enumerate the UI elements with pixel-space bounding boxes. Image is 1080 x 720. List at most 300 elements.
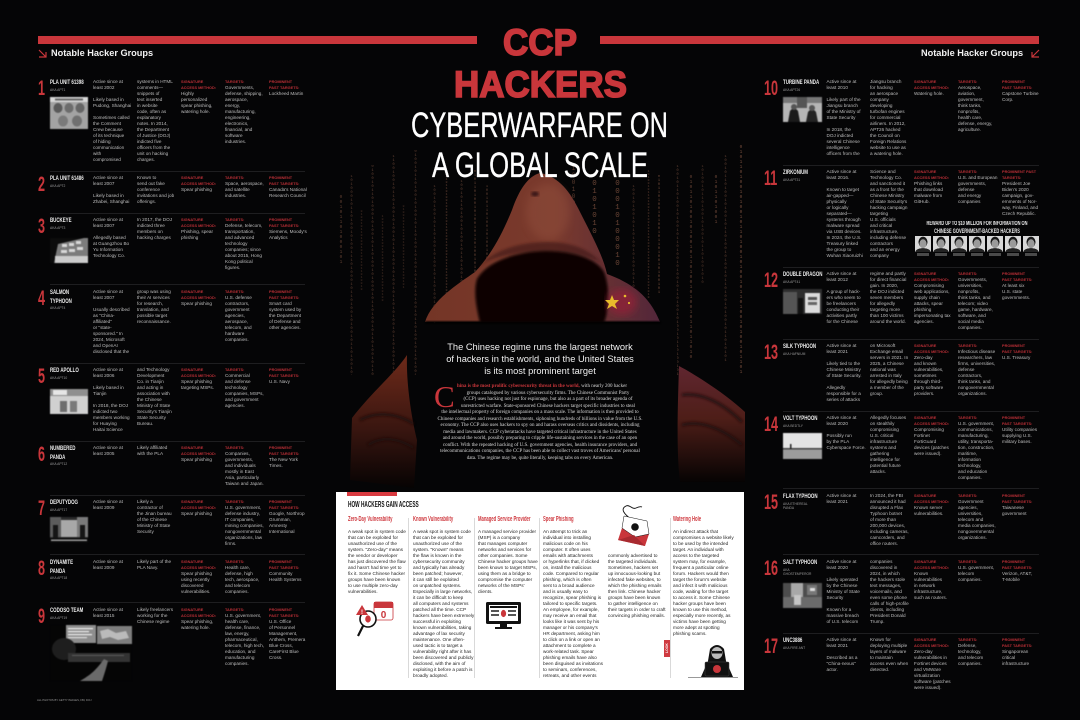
methods: ACCESS METHOD: bbox=[181, 566, 216, 570]
history: Allegedly bbox=[826, 385, 845, 390]
history continued bbox=[870, 415, 906, 475]
method text: spear phishing continued bbox=[608, 553, 666, 619]
past targets: PROMINENT bbox=[1002, 416, 1025, 420]
targets bbox=[958, 637, 983, 667]
methods: party software bbox=[914, 385, 943, 390]
history continued: PLA Navy. bbox=[137, 565, 158, 570]
past targets: TARGETS: bbox=[1002, 176, 1021, 180]
past targets: PAST TARGETS: bbox=[269, 506, 299, 510]
targets: nonprofits, bbox=[958, 109, 980, 114]
methods: ACCESS METHOD: bbox=[914, 176, 949, 180]
methods: impersonating tax bbox=[914, 313, 951, 318]
history continued: targeting more bbox=[870, 307, 900, 312]
history continued: text inserted bbox=[137, 97, 162, 102]
past targets: PROMINENT bbox=[269, 368, 292, 372]
targets: engineering, bbox=[225, 115, 251, 120]
binary rain background: 0101101001010010110100101001011010010100101101 bbox=[738, 145, 744, 375]
targets: technology, bbox=[958, 463, 981, 468]
methods: Zero-day bbox=[914, 649, 933, 654]
history continued: deploying multiple bbox=[870, 643, 907, 648]
targets: governments, bbox=[958, 181, 986, 186]
targets: U.S. and European bbox=[958, 175, 997, 180]
method text: managed service provider: networks and services for bbox=[478, 547, 531, 552]
targets: think tanks, and bbox=[958, 379, 991, 384]
past targets: PROMINENT bbox=[269, 500, 292, 504]
targets: and individuals bbox=[225, 463, 256, 468]
history continued: gain. In 2020, bbox=[870, 283, 898, 288]
method text: known vulnerability: been discovered and publicly bbox=[413, 655, 473, 660]
reward headline: REWARD UP TO $10 MILLION FOR INFORMATION ON bbox=[926, 221, 1027, 227]
methods bbox=[914, 271, 951, 325]
group 17: UNC3886 bbox=[764, 637, 1040, 697]
targets: electronics, bbox=[225, 121, 248, 126]
reward headline: CHINESE GOVERNMENT-BACKED HACKERS bbox=[934, 229, 1020, 235]
past targets: PROMINENT bbox=[269, 218, 292, 222]
history: Known to target bbox=[826, 187, 859, 192]
method text: spear phishing: emails with attachments bbox=[543, 553, 593, 558]
method heading: spear phishing: Spear Phishing bbox=[543, 516, 574, 523]
past targets: CareFirst Blue bbox=[269, 649, 299, 654]
targets: nonprofits, bbox=[958, 289, 980, 294]
history: at Guangzhou Bo bbox=[93, 241, 129, 246]
method text: known vulnerability: known vulnerabilities, taking bbox=[413, 625, 471, 630]
methods: watering hole. bbox=[181, 625, 210, 630]
intro body text: telecommunications companies, the CCP has been able to collect vast troves of Americans' personal bbox=[440, 449, 640, 454]
history: Zhabei, Shanghai bbox=[93, 199, 129, 204]
photo: press conference bbox=[782, 289, 822, 314]
method text: spear phishing continued: convincing phishing emails. bbox=[608, 613, 665, 618]
past targets: Taiwanese bbox=[1002, 505, 1024, 510]
history continued: potential future bbox=[870, 463, 901, 468]
panel heading: HOW HACKERS GAIN ACCESS bbox=[348, 499, 419, 509]
name bbox=[783, 493, 833, 510]
group 12: Double Dragon bbox=[764, 271, 1040, 331]
history continued: as a front for the bbox=[870, 187, 904, 192]
targets bbox=[225, 607, 264, 667]
history continued: in website bbox=[137, 103, 158, 108]
past targets: way, Finland, and bbox=[1002, 205, 1038, 210]
method text: spear phishing: manager or his company's bbox=[543, 625, 598, 630]
methods: using recently bbox=[181, 577, 210, 582]
history: A group of hack- bbox=[826, 289, 860, 294]
targets: manufacturing bbox=[225, 655, 254, 660]
targets: mostly in East bbox=[225, 469, 254, 474]
targets: hardware bbox=[225, 331, 244, 336]
binary rain background: 00101101000101 bbox=[338, 195, 344, 265]
targets: defense, high bbox=[225, 571, 253, 576]
number: 12 bbox=[764, 268, 778, 292]
name bbox=[783, 559, 833, 576]
name: AKA BEDTLY bbox=[783, 424, 803, 428]
method text: watering hole: target. An individual with bbox=[673, 547, 724, 552]
history continued: company bbox=[870, 253, 889, 258]
history continued: State Security bbox=[137, 415, 166, 420]
targets: and advanced bbox=[225, 235, 254, 240]
methods: in network bbox=[914, 583, 935, 588]
name bbox=[783, 169, 819, 182]
history continued: Development bbox=[137, 373, 164, 378]
targets: defense bbox=[958, 367, 975, 372]
targets: utility, transporta- bbox=[958, 439, 993, 444]
method text: spear phishing: malicious code on his bbox=[543, 541, 588, 546]
method text: zero-day: the vendor or developer bbox=[348, 553, 398, 558]
targets: government bbox=[225, 307, 250, 312]
method text: managed service provider: clients. bbox=[478, 589, 493, 594]
history continued: arrested in Italy bbox=[870, 373, 902, 378]
targets: TARGETS: bbox=[958, 272, 977, 276]
subheading bbox=[446, 342, 634, 376]
method text: watering hole: phishing scams. bbox=[673, 631, 707, 636]
method text: managed service provider: other companies. Some bbox=[478, 553, 528, 558]
history continued: around the world. bbox=[870, 319, 906, 324]
method text: known vulnerability: the flaw is known in the bbox=[413, 553, 461, 558]
targets: information bbox=[958, 457, 981, 462]
targets: and telecom bbox=[225, 583, 250, 588]
method text: spear phishing continued: infected fake websites, to bbox=[608, 577, 661, 582]
history continued: and an energy bbox=[870, 247, 900, 252]
history: responsible for a bbox=[826, 391, 861, 396]
history: affiliated" bbox=[93, 319, 112, 324]
method text: spear phishing continued: groups have been known bbox=[608, 595, 660, 600]
binary rain background: 1010010110100101001011010010100101101001010 bbox=[647, 170, 650, 299]
name: FLAX TYPHOON bbox=[783, 493, 818, 500]
methods: Compromising bbox=[914, 427, 944, 432]
past targets: PROMINENT bbox=[269, 446, 292, 450]
history continued: than 100 victims bbox=[870, 313, 904, 318]
history: of its technique bbox=[93, 133, 124, 138]
method text: spear phishing continued: up innocuous-looking but bbox=[608, 571, 660, 576]
method text: zero-day: to use multiple zero-day bbox=[348, 583, 398, 588]
method text: known vulnerability: been patched; however, bbox=[413, 571, 463, 576]
photo: harbor bbox=[782, 433, 822, 459]
history continued: including cameras, bbox=[870, 529, 909, 534]
targets: telecom, high tech, bbox=[225, 643, 264, 648]
history: Active since at bbox=[93, 289, 123, 294]
past targets: PROMINENT bbox=[1002, 560, 1025, 564]
methods: were issued). bbox=[914, 451, 942, 456]
history continued: hacking campaign bbox=[870, 205, 907, 210]
methods: SIGNATURE bbox=[181, 218, 203, 222]
methods: sometimes bbox=[914, 373, 936, 378]
past targets: PAST TARGETS: bbox=[269, 614, 299, 618]
history bbox=[826, 343, 862, 403]
history: "China-nexus" bbox=[826, 661, 856, 666]
past targets: U.S. state bbox=[1002, 289, 1022, 294]
history: Active since at bbox=[826, 559, 856, 564]
targets: U.S. government, bbox=[958, 421, 994, 426]
history: Cyberspace Force. bbox=[826, 445, 866, 450]
history: as "China- bbox=[93, 313, 115, 318]
method heading: zero-day: Zero-Day Vulnerability bbox=[348, 516, 392, 523]
name: UNC3886 bbox=[783, 637, 802, 644]
name: SALT TYPHOON bbox=[783, 559, 817, 566]
targets bbox=[958, 343, 995, 397]
method text: known vulnerability: and typically has already bbox=[413, 565, 464, 570]
history continued bbox=[870, 271, 906, 325]
group 3: Buckeye bbox=[38, 214, 307, 270]
methods bbox=[914, 559, 949, 601]
targets bbox=[225, 445, 264, 487]
method text: spear phishing bbox=[543, 529, 603, 679]
history continued: unit on hacking bbox=[137, 151, 168, 156]
targets: companies, MSPs, bbox=[225, 391, 264, 396]
history continued: the Jinan bureau bbox=[137, 511, 172, 516]
method text: managed service provider: that manages computer bbox=[478, 541, 527, 546]
targets bbox=[958, 271, 993, 331]
methods: SIGNATURE bbox=[181, 608, 203, 612]
methods: and VMWare bbox=[914, 667, 941, 672]
methods: SIGNATURE bbox=[181, 560, 203, 564]
history continued: notes. In 2014, bbox=[137, 121, 168, 126]
number: 14 bbox=[764, 412, 778, 436]
history: Security bbox=[826, 595, 843, 600]
past targets: PROMINENT bbox=[1002, 494, 1025, 498]
history: Likely based in bbox=[93, 193, 124, 198]
number: 6 bbox=[38, 442, 45, 466]
history bbox=[93, 499, 123, 511]
methods: vulnerabilities, bbox=[914, 367, 943, 372]
method text: managed service provider: Chinese hacker groups have bbox=[478, 559, 538, 564]
past targets: PROMINENT bbox=[1002, 80, 1025, 84]
method text: spear phishing continued: Sometimes, hackers set bbox=[608, 565, 658, 570]
method text: known vulnerability: it can be difficult to keep bbox=[413, 595, 463, 600]
name: ZIRKONIUM bbox=[783, 169, 808, 176]
past targets: the Department bbox=[269, 313, 301, 318]
group 6: Numbered Panda bbox=[38, 445, 306, 489]
past targets: PAST TARGETS: bbox=[1002, 422, 1032, 426]
history continued: APT26 hacked bbox=[870, 127, 900, 132]
past targets: PROMINENT bbox=[269, 80, 292, 84]
method text: managed service provider: been known to target MSPs, bbox=[478, 565, 537, 570]
targets: about 2015, Hong bbox=[225, 253, 262, 258]
past targets: U.S. Navy bbox=[269, 379, 290, 384]
targets: TARGETS: bbox=[225, 80, 244, 84]
history continued: of State Security's bbox=[870, 199, 907, 204]
methods: attacks, spear bbox=[914, 301, 943, 306]
history bbox=[93, 607, 123, 619]
targets: Defense, telecom, bbox=[225, 223, 262, 228]
method text: zero-day: fix it. Some Chinese hacker bbox=[348, 571, 405, 576]
targets: universities, bbox=[958, 283, 983, 288]
name: PANDA bbox=[783, 506, 794, 510]
methods: ACCESS METHOD: bbox=[181, 86, 216, 90]
history: least 2007 bbox=[93, 295, 114, 300]
history: the Comment bbox=[93, 121, 121, 126]
method text: known vulnerability: patched all the time. CCP bbox=[413, 607, 466, 612]
history: for Huaying bbox=[93, 421, 117, 426]
methods: vulnerabilities bbox=[914, 577, 942, 582]
left arm fold bbox=[360, 414, 414, 448]
method text: known vulnerability: it can still be exploited bbox=[413, 577, 459, 582]
history: Active since at bbox=[93, 217, 123, 222]
history: officers from the bbox=[826, 151, 860, 156]
history: Active since at bbox=[826, 637, 856, 642]
method text: known vulnerability: successful in exploiting bbox=[413, 619, 461, 624]
methods: Phishing links bbox=[914, 181, 942, 186]
history: air-gapped— bbox=[826, 193, 853, 198]
title bbox=[411, 22, 668, 185]
history: least 2015 bbox=[93, 613, 114, 618]
method text: spear phishing: to click on a link or open an bbox=[543, 637, 600, 642]
history: via USB devices. bbox=[826, 229, 862, 234]
past targets: U.S. Treasury bbox=[1002, 355, 1030, 360]
method text: spear phishing: been disguised as invitations bbox=[543, 661, 603, 666]
past targets: International bbox=[269, 529, 295, 534]
method text: managed service provider: compromise the computer bbox=[478, 577, 532, 582]
targets: TARGETS: bbox=[225, 608, 244, 612]
methods: vulnerabilities. bbox=[914, 511, 943, 516]
name: BUCKEYE bbox=[50, 217, 72, 224]
targets: think tanks, and bbox=[958, 295, 991, 300]
targets: contractors, bbox=[225, 301, 249, 306]
past targets bbox=[1002, 271, 1032, 301]
past targets: of Personnel bbox=[269, 625, 295, 630]
methods bbox=[181, 218, 216, 240]
method text: spear phishing: retreats, and other events bbox=[543, 673, 596, 678]
history: Active since at bbox=[93, 79, 123, 84]
past targets: campaign, gov- bbox=[1002, 193, 1034, 198]
past targets: Community bbox=[269, 571, 292, 576]
past targets: Cross. bbox=[269, 655, 282, 660]
methods: Known server bbox=[914, 505, 942, 510]
targets: companies. bbox=[225, 589, 249, 594]
methods bbox=[914, 169, 949, 205]
name: AKA HAFNIUM bbox=[783, 352, 805, 356]
method text: watering hole: access to the targeted bbox=[673, 553, 719, 558]
history: Pudong, Shanghai bbox=[93, 103, 131, 108]
name bbox=[50, 175, 84, 188]
binary rain background: 0100101101001010010110100101 bbox=[402, 205, 405, 289]
history continued: Trump. bbox=[870, 619, 885, 624]
targets: telecom; video bbox=[958, 301, 988, 306]
methods: Fortinet bbox=[914, 433, 930, 438]
targets: nongovernmental bbox=[958, 529, 994, 534]
method text: watering hole: hacker groups have been bbox=[673, 601, 726, 606]
method text: watering hole: known to use this method, bbox=[673, 607, 727, 612]
targets: companies bbox=[958, 199, 980, 204]
past targets bbox=[1002, 79, 1039, 103]
targets: Kong political bbox=[225, 259, 253, 264]
history continued: for allegedly bbox=[870, 301, 895, 306]
history continued: of the Chinese bbox=[137, 517, 167, 522]
past targets bbox=[1002, 559, 1032, 583]
methods bbox=[914, 415, 949, 457]
number: 10 bbox=[764, 76, 778, 100]
method heading: watering hole: Watering Hole bbox=[673, 516, 701, 523]
history continued: contractors bbox=[870, 241, 893, 246]
photo: hacker at monitors bbox=[50, 625, 132, 681]
history continued: for hacking bbox=[870, 85, 893, 90]
history continued: systems in HTML bbox=[137, 79, 173, 84]
methods: infrastructure, bbox=[914, 589, 942, 594]
history: Likely operated bbox=[826, 577, 858, 582]
methods: Spear phishing, bbox=[181, 619, 213, 624]
methods bbox=[181, 290, 216, 306]
history continued: calls of high-profile bbox=[870, 601, 909, 606]
targets: Commercial bbox=[225, 373, 250, 378]
history continued: on Microsoft bbox=[870, 343, 895, 348]
targets: organizations. bbox=[958, 391, 987, 396]
intro body text: economy. The CCP also uses hackers to spy on and harass overseas critics and dissidents, including bbox=[441, 423, 639, 428]
targets: law, energy, bbox=[225, 631, 249, 636]
past targets: governments. bbox=[1002, 295, 1030, 300]
name: AKA APT12 bbox=[50, 462, 67, 466]
methods: SIGNATURE bbox=[181, 500, 203, 504]
targets: Taiwan and Japan. bbox=[225, 481, 264, 486]
methods: SIGNATURE bbox=[181, 290, 203, 294]
history continued: servers in 2021. In bbox=[870, 355, 908, 360]
methods: ACCESS METHOD: bbox=[914, 644, 949, 648]
past targets: Management, bbox=[269, 631, 297, 636]
methods bbox=[914, 79, 949, 97]
method text: watering hole: frequent a particular online bbox=[673, 565, 729, 570]
icon: hooked envelope bbox=[618, 504, 652, 548]
method text: known vulnerability: Especially in large networks, bbox=[413, 589, 472, 594]
history: State Security bbox=[826, 115, 855, 120]
history: sponsored." In bbox=[93, 331, 123, 336]
hood shade bbox=[478, 242, 606, 270]
method text: spear phishing: phishing, which is often bbox=[543, 577, 591, 582]
method text: spear phishing: code. Compared to regular bbox=[543, 571, 599, 576]
history continued: gathering bbox=[870, 451, 889, 456]
method text: spear phishing continued: commonly advertised to bbox=[608, 553, 658, 558]
history: least 2009 bbox=[93, 565, 114, 570]
binary rain background: 101001011010010100101101001010 bbox=[700, 165, 704, 285]
history continued: the Chinese bbox=[137, 397, 162, 402]
history bbox=[93, 559, 123, 571]
methods: such as routers. bbox=[914, 595, 947, 600]
past targets: PAST TARGETS: bbox=[269, 182, 299, 186]
history continued: Ministry of State bbox=[137, 403, 170, 408]
icon: magnifier, warning and calendar: ! bbox=[361, 610, 363, 616]
name bbox=[50, 367, 92, 380]
number: 11 bbox=[764, 166, 777, 190]
past targets: Utility companies bbox=[1002, 427, 1037, 432]
hood highlight bbox=[526, 184, 570, 240]
photo: press briefing bbox=[50, 517, 88, 543]
method text: spear phishing: on, install the malicious bbox=[543, 565, 591, 570]
history continued: Known for bbox=[870, 637, 891, 642]
name: GHOSTEMPEROR bbox=[783, 572, 811, 576]
history continued bbox=[137, 79, 173, 162]
history continued: for commercial bbox=[870, 115, 900, 120]
binary rain background: 0101010 bbox=[590, 180, 598, 236]
history continued: and critical bbox=[870, 223, 892, 228]
past targets: PAST TARGETS: bbox=[269, 566, 299, 570]
methods: SIGNATURE bbox=[914, 272, 936, 276]
past targets: Amnesty bbox=[269, 523, 287, 528]
history continued: companies bbox=[870, 559, 892, 564]
name bbox=[783, 415, 833, 428]
history continued: systems and bbox=[870, 445, 896, 450]
targets: TARGETS: bbox=[225, 446, 244, 450]
method text: spear phishing: computer. It often uses bbox=[543, 547, 590, 552]
targets: TARGETS: bbox=[958, 494, 977, 498]
history: Wuhan Xiaoruizhi bbox=[826, 253, 863, 258]
history: Likely based in bbox=[93, 385, 124, 390]
group 7: DeputyDog bbox=[38, 499, 306, 549]
targets bbox=[958, 169, 997, 205]
history: Jiangsu branch bbox=[826, 103, 858, 108]
history bbox=[93, 79, 131, 162]
methods: Known bbox=[914, 571, 928, 576]
method heading: managed service provider: Managed Service Provider bbox=[478, 516, 531, 523]
history: Active since at bbox=[826, 169, 856, 174]
method text: known vulnerability: disclosed, with the aim of bbox=[413, 661, 465, 666]
intro body text: unrestricted warfare. State-sponsored Chinese hackers target specific industries to steal bbox=[461, 404, 635, 409]
methods: targeting MSPs. bbox=[181, 385, 214, 390]
title: CCP bbox=[503, 22, 577, 63]
